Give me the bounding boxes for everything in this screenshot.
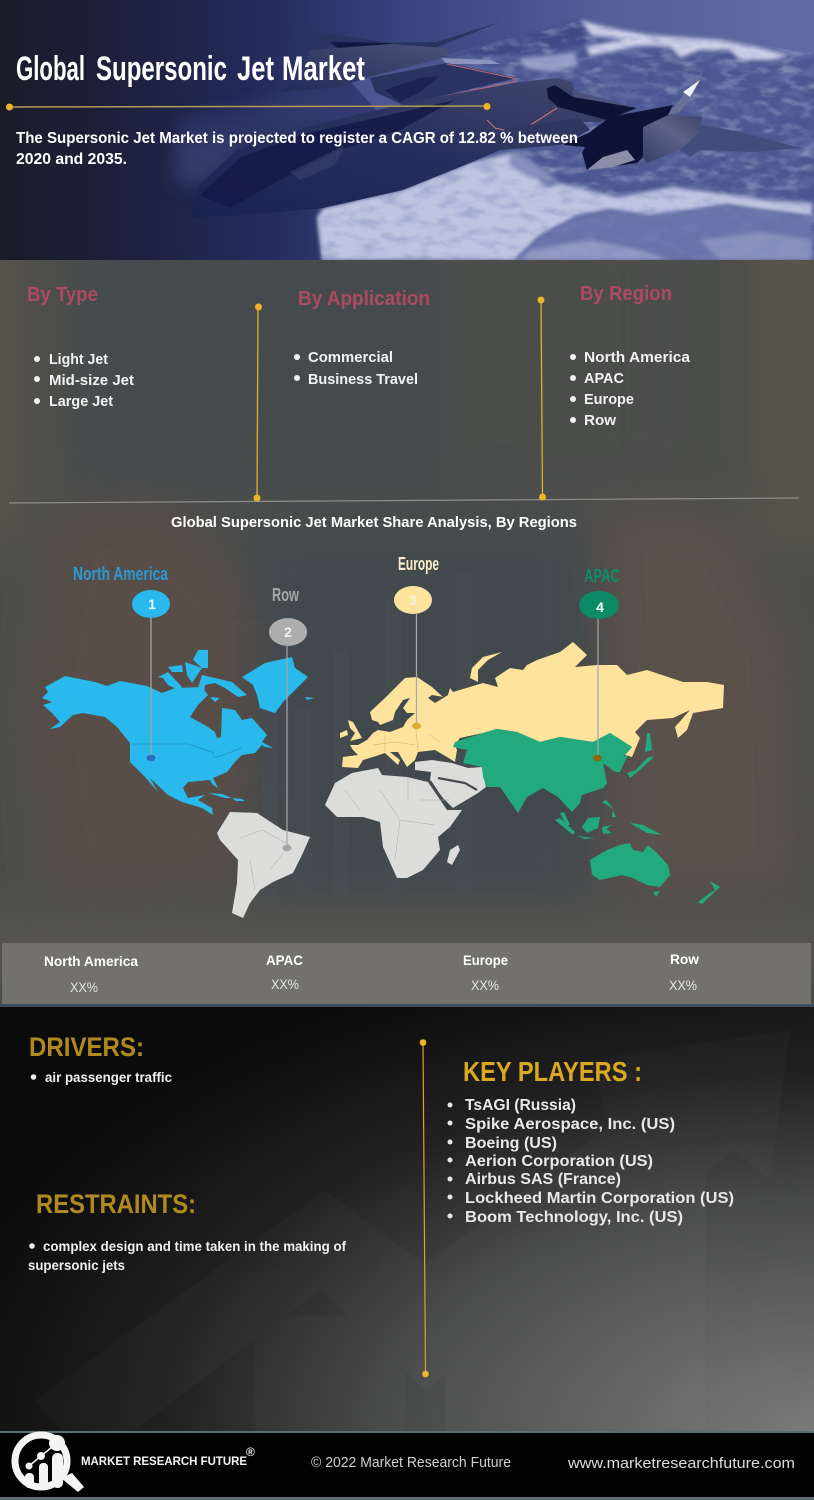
heading: title: Global (16, 50, 85, 88)
text: restraints: RESTRAINTS: (36, 1189, 196, 1219)
panel: body background (0, 260, 814, 958)
panel: hero banner (0, 0, 814, 260)
image: supersonic jet (190, 22, 800, 218)
row: region names: North America (44, 953, 138, 969)
jet: right engine (547, 70, 800, 170)
text: drivers (29, 1032, 172, 1085)
heading: title: Jet (237, 50, 274, 88)
text: restraints: supersonic jets (28, 1257, 125, 1273)
list: applications: Commercial (308, 349, 393, 366)
marker: row: Row (272, 585, 300, 605)
text: key players: KEY PLAYERS : (463, 1056, 642, 1087)
list: jet types: Large Jet (49, 393, 113, 410)
list: regions: North America (584, 349, 691, 366)
list: companies: Boom Technology, Inc. (US) (465, 1209, 683, 1226)
marker: row (269, 585, 307, 851)
text: drivers: air passenger traffic (45, 1069, 172, 1085)
marker: north america (73, 564, 170, 761)
text: market summary: The Supersonic Jet Market is projected to register a CAGR of 12.82 % between (16, 130, 578, 147)
text: restraints (28, 1189, 346, 1273)
marker: europe: 3 (409, 592, 417, 608)
heading: by region: By Region (580, 283, 672, 305)
list: jet types: Light Jet (49, 351, 108, 368)
list: regions: Row (584, 412, 616, 429)
map region: row south america and africa (217, 760, 486, 918)
heading: title (16, 50, 365, 88)
jet: wing (370, 63, 517, 105)
marker: north america: North America (73, 564, 169, 584)
list: regions (570, 349, 691, 429)
text: drivers: DRIVERS: (29, 1032, 144, 1062)
list: applications (294, 349, 418, 388)
row: share values: XX% (669, 977, 697, 993)
list: companies: Lockheed Martin Corporation (US) (465, 1190, 734, 1207)
marker: europe: Europe (398, 554, 439, 574)
heading: by type: By Type (27, 284, 98, 306)
text: website: www.marketresearchfuture.com (567, 1455, 795, 1472)
map region: north america (42, 650, 314, 815)
text: copyright: © 2022 Market Research Future (311, 1455, 511, 1471)
marker: apac: APAC (584, 566, 620, 586)
image: mountain range (170, 0, 814, 260)
list: companies: Boeing (US) (465, 1135, 557, 1152)
text: market summary (16, 130, 578, 168)
text: restraints: complex design and time taken in the making of (43, 1238, 346, 1254)
text: brand name: ® (246, 1445, 255, 1459)
heading: share analysis: Global Supersonic Jet Market Share Analysis, By Regions (171, 515, 577, 531)
list: companies: Aerion Corporation (US) (465, 1153, 653, 1170)
list: regions: Europe (584, 391, 634, 408)
row: share values: XX% (471, 977, 499, 993)
text: brand name (81, 1445, 255, 1468)
list: regions: APAC (584, 370, 624, 387)
list: applications: Business Travel (308, 371, 418, 388)
heading: title: Market (282, 50, 365, 88)
jet: fuselage (190, 78, 637, 218)
row: region names: APAC (266, 952, 303, 968)
row: region names: Row (670, 951, 699, 967)
chart: world map by region (42, 554, 724, 918)
list: companies (448, 1097, 734, 1226)
list: jet types: Mid-size Jet (49, 372, 134, 389)
text: key players (448, 1056, 734, 1226)
panel: by region (570, 283, 691, 429)
list: companies: TsAGI (Russia) (465, 1097, 576, 1114)
panel: by type (27, 284, 134, 410)
map region: europe and russia (340, 642, 724, 768)
marker: north america: 1 (148, 596, 156, 612)
row: share values: XX% (70, 979, 98, 995)
panel: footer (0, 1431, 814, 1500)
row: region names (44, 951, 699, 969)
row: share values (70, 976, 697, 995)
dividers: gold vertical lines and horizontal rule (9, 296, 799, 503)
list: companies: Airbus SAS (France) (465, 1171, 621, 1188)
jet: left engine and fin (280, 22, 500, 92)
marker: row: 2 (284, 624, 292, 640)
list: companies: Spike Aerospace, Inc. (US) (465, 1116, 675, 1133)
list: jet types (34, 351, 134, 410)
text: brand name: MARKET RESEARCH FUTURE (81, 1456, 247, 1468)
panel: by application (294, 288, 430, 388)
text: market summary: 2020 and 2035. (16, 151, 127, 168)
panel: drivers restraints and key players (0, 1007, 814, 1432)
heading: title: Supersonic (96, 50, 227, 88)
marker: apac: 4 (596, 599, 604, 615)
map region: apac (453, 729, 720, 904)
divider: gold vertical line (420, 1039, 429, 1377)
row: region names: Europe (463, 952, 508, 968)
marker: apac (579, 566, 620, 761)
row: share values: XX% (271, 976, 299, 992)
heading: by application: By Application (298, 288, 430, 310)
icon: market research future logo (15, 1435, 84, 1492)
marker: europe (394, 554, 439, 729)
table: regional share (0, 943, 814, 1007)
divider: gold line with end dots (6, 103, 490, 110)
